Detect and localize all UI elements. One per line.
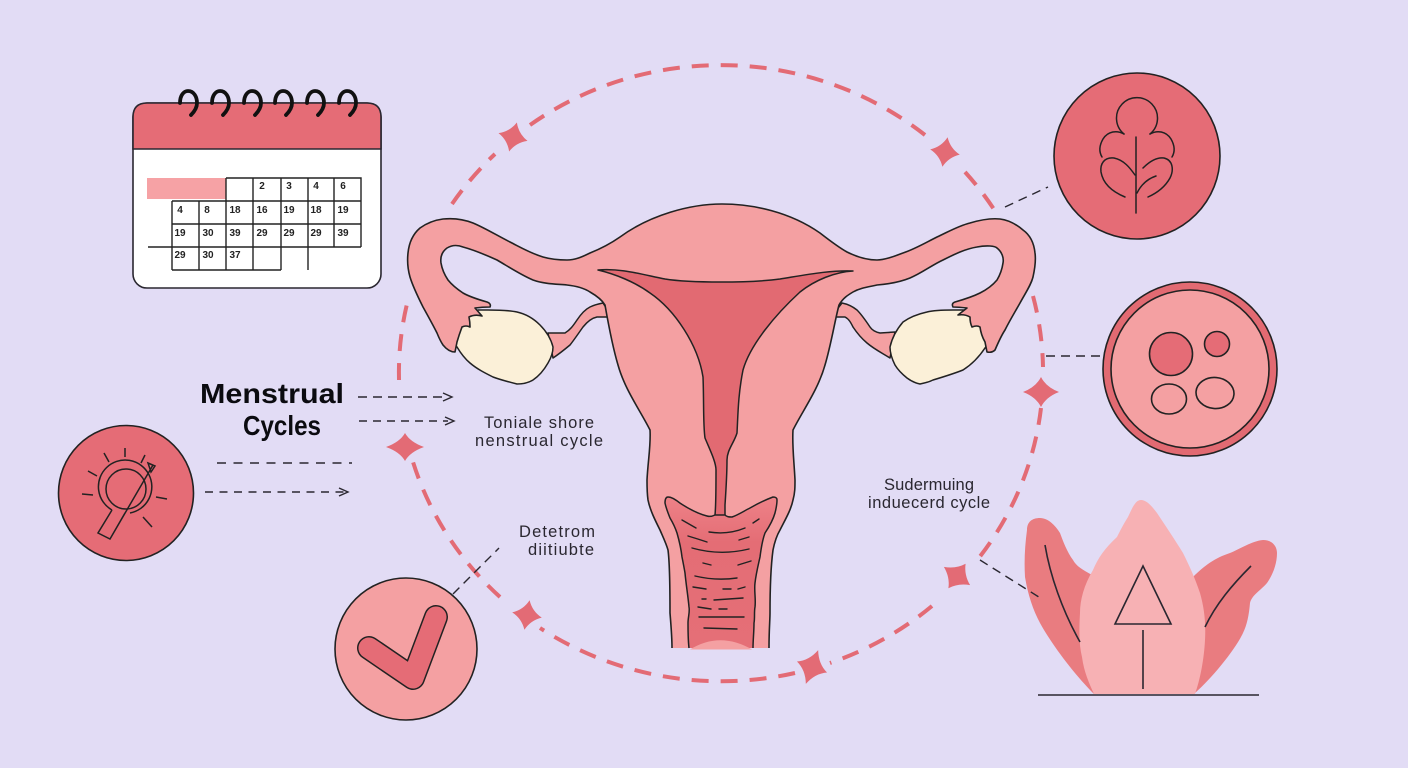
title arrows xyxy=(358,393,454,425)
calendar icon: 29 xyxy=(174,250,186,261)
lens icon xyxy=(58,426,194,560)
calendar icon: 30 xyxy=(202,250,214,261)
leaf icon xyxy=(1054,73,1220,239)
calendar icon: 29 xyxy=(256,228,268,239)
label: toniale shore: Toniale shore xyxy=(484,414,594,432)
calendar icon xyxy=(133,91,381,288)
leaf icon connector xyxy=(1005,187,1048,207)
calendar icon: 39 xyxy=(337,228,349,239)
cycle ring markers xyxy=(386,119,1059,689)
calendar icon: 8 xyxy=(204,205,210,216)
label: detetrom: diitiubte xyxy=(528,541,594,559)
calendar icon: 4 xyxy=(313,181,319,192)
ovarian ligaments xyxy=(548,303,895,358)
calendar icon: 18 xyxy=(229,205,241,216)
calendar icon: 3 xyxy=(286,181,292,192)
vaginal canal xyxy=(665,497,777,648)
title xyxy=(200,378,344,441)
calendar icon: 30 xyxy=(202,228,214,239)
label: sudermuing xyxy=(868,476,990,512)
label: toniale shore: nenstrual cycle xyxy=(475,432,603,450)
calendar icon: 19 xyxy=(337,205,349,216)
ovaries xyxy=(452,310,992,384)
label: toniale shore xyxy=(475,414,603,450)
calendar icon: 19 xyxy=(283,205,295,216)
calendar icon: 29 xyxy=(310,228,322,239)
title: Menstrual xyxy=(200,378,344,409)
calendar icon: 6 xyxy=(340,181,346,192)
flower icon xyxy=(1025,500,1277,695)
calendar icon: 37 xyxy=(229,250,241,261)
uterine cavity xyxy=(598,270,853,515)
label: detetrom xyxy=(519,523,595,559)
canal fold lines xyxy=(682,519,759,629)
label: sudermuing: Sudermuing xyxy=(884,476,974,494)
dashed guide lines from lens icon xyxy=(205,463,352,496)
cell icon connector xyxy=(1046,355,1102,357)
vaginal canal opening xyxy=(690,640,752,650)
check icon connector xyxy=(453,548,499,594)
calendar icon: 18 xyxy=(310,205,322,216)
uterus anatomy diagram xyxy=(408,204,1035,650)
calendar icon: 29 xyxy=(283,228,295,239)
dashed cycle ring xyxy=(399,65,1043,681)
calendar icon: 19 xyxy=(174,228,186,239)
label: detetrom: Detetrom xyxy=(519,523,595,541)
calendar icon: 39 xyxy=(229,228,241,239)
cell icon xyxy=(1103,282,1277,456)
title: Cycles xyxy=(243,410,321,441)
flower icon connector xyxy=(980,560,1042,599)
label: sudermuing: induecerd cycle xyxy=(868,494,990,512)
calendar icon: 16 xyxy=(256,205,268,216)
calendar icon: 4 xyxy=(177,205,183,216)
check icon xyxy=(335,578,477,720)
uterine body and fallopian tubes xyxy=(408,204,1035,648)
calendar icon: 2 xyxy=(259,181,265,192)
